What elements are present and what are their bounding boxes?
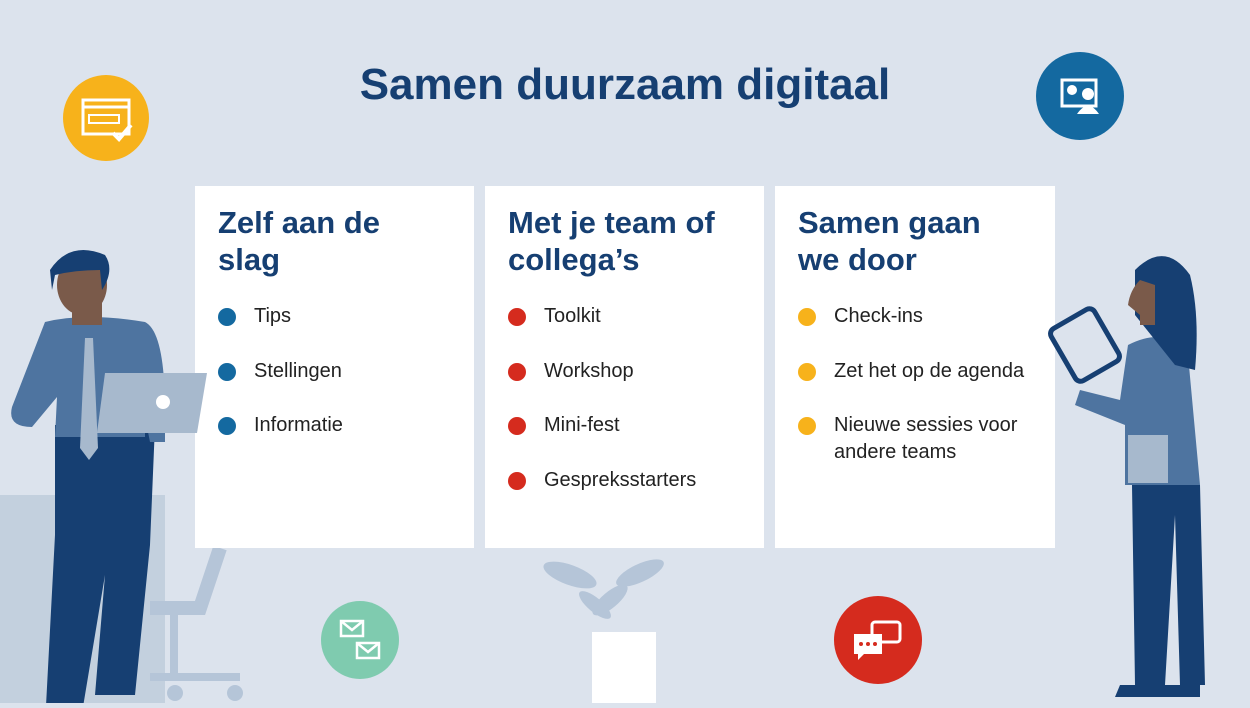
- item: Tips: Tips: [254, 305, 291, 327]
- item: Stellingen: Stellingen: [254, 360, 342, 382]
- item: Mini-fest: [508, 414, 620, 436]
- icon: red chat: [834, 596, 922, 684]
- item: nieuwe sessies: [798, 414, 1018, 463]
- item: Toolkit: Toolkit: [544, 305, 601, 327]
- panel: samen gaan we door: [775, 186, 1055, 548]
- panel: met je team: [485, 186, 764, 548]
- chair: [150, 548, 243, 701]
- item: Gespreksstarters: Gespreksstarters: [544, 469, 696, 491]
- item: nieuwe sessies: Nieuwe sessies voor: [834, 414, 1017, 436]
- item: Check-ins: Check-ins: [834, 305, 923, 327]
- panel: zelf aan de slag: [195, 186, 474, 548]
- panel: samen gaan we door: Samen gaan: [798, 205, 981, 240]
- item: Workshop: Workshop: [544, 360, 634, 382]
- panel: zelf aan de slag: slag: [218, 242, 280, 277]
- panel: zelf aan de slag: Zelf aan de: [218, 205, 380, 240]
- item: Mini-fest: Mini-fest: [544, 414, 620, 436]
- item: Informatie: Informatie: [254, 414, 343, 436]
- icon: blue video call: [1036, 52, 1124, 140]
- icon: green mail: [321, 601, 399, 679]
- panel: samen gaan we door: we door: [798, 242, 917, 277]
- figure: man with laptop: [11, 250, 207, 703]
- title: Samen duurzaam digitaal: [360, 60, 890, 109]
- item: nieuwe sessies: andere teams: [834, 441, 956, 463]
- item: agenda: Zet het op de agenda: [834, 360, 1024, 382]
- icon: yellow browser: [63, 75, 149, 161]
- figure: woman with tablet: [1048, 256, 1205, 697]
- item: Tips: [218, 305, 291, 327]
- background block: [0, 495, 165, 703]
- plant: [544, 559, 664, 703]
- panel: met je team: Met je team of: [508, 205, 715, 240]
- panel: met je team: collega’s: [508, 242, 640, 277]
- item: Toolkit: [508, 305, 601, 327]
